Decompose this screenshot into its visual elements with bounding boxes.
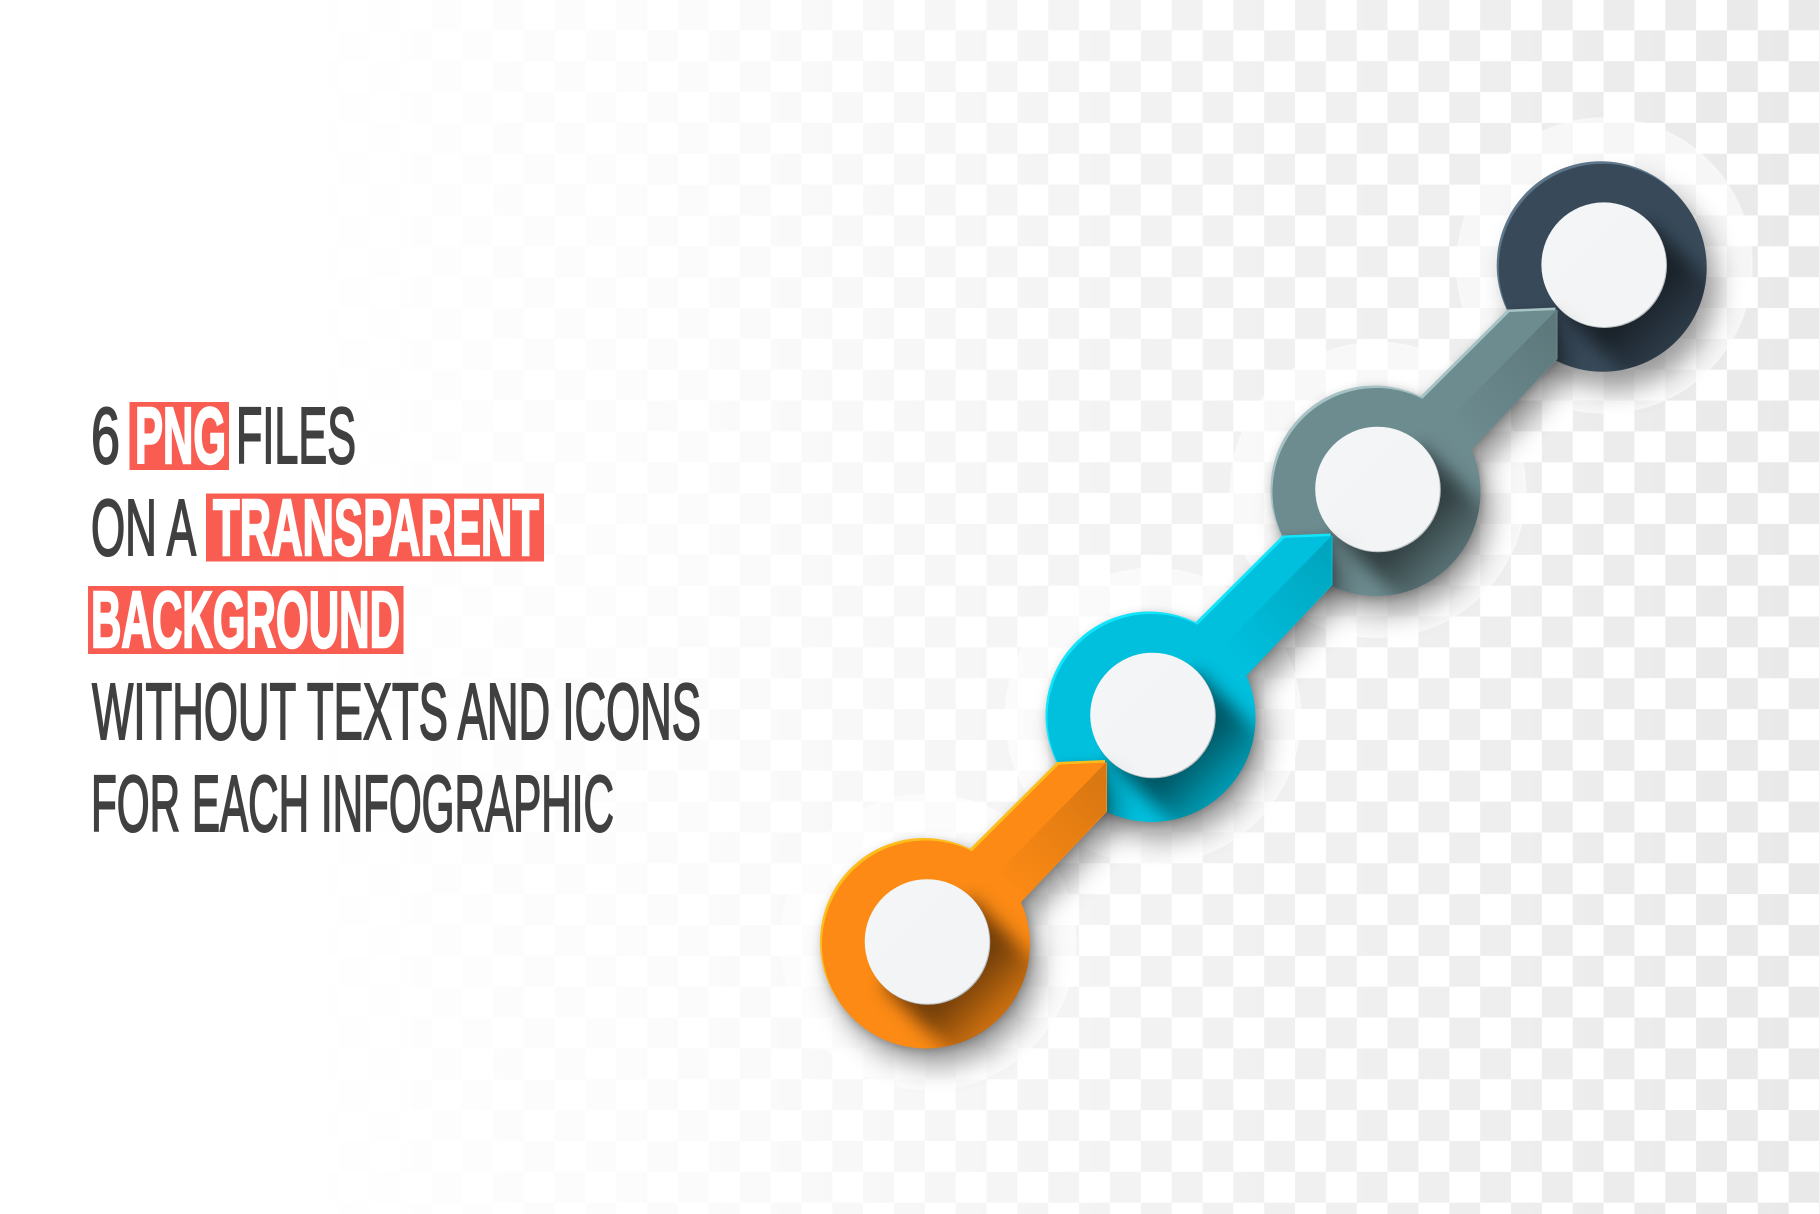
step 1 node: orange ring with arrow arm: [820, 760, 1117, 1065]
headline text block: [88, 391, 701, 848]
line 1: 6 PNG FILES: PNG: [135, 391, 226, 480]
step 3 node: grey-teal ring with arrow arm: [1270, 308, 1568, 613]
line 4: WITHOUT TEXTS AND ICONS: WITHOUT TEXTS AND ICONS: [92, 667, 701, 756]
line 5: FOR EACH INFOGRAPHIC: FOR EACH INFOGRAPHIC: [91, 759, 614, 848]
line 3: BACKGROUND: BACKGROUND: [91, 575, 400, 664]
line 2: ON A TRANSPARENT: [91, 483, 544, 572]
line 1: 6 PNG FILES: FILES: [236, 391, 356, 480]
line 2: ON A TRANSPARENT: ON A: [91, 483, 196, 572]
step 2 node: cyan ring with arrow arm: [1045, 534, 1342, 839]
halo discs behind the nodes: [780, 118, 1752, 1090]
step 4 node: dark slate ring: [1497, 161, 1717, 389]
line 1: 6 PNG FILES: [91, 391, 356, 480]
line 1: 6 PNG FILES: 6: [91, 391, 120, 480]
line 3: BACKGROUND: [88, 575, 404, 664]
line 2: ON A TRANSPARENT: TRANSPARENT: [213, 483, 539, 572]
